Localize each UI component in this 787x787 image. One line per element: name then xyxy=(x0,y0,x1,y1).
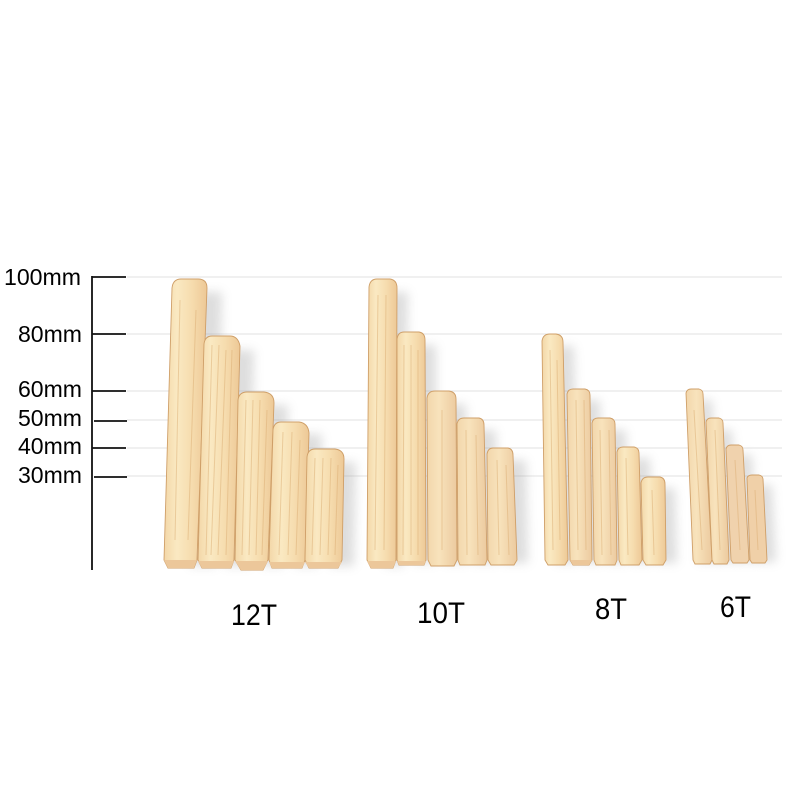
dowel group: 6T xyxy=(686,389,776,564)
size label: 10T: 10T xyxy=(417,597,465,630)
length labels: 40mm xyxy=(18,433,82,459)
length labels: 60mm xyxy=(18,376,82,402)
size label: 12T: 12T xyxy=(231,599,277,632)
dowel group: 10T xyxy=(367,279,528,568)
size label: 6T: 6T xyxy=(720,591,751,624)
grid lines xyxy=(127,277,782,476)
length labels: 30mm xyxy=(18,462,82,488)
length labels: 80mm xyxy=(18,321,82,347)
length labels: 100mm xyxy=(4,264,81,290)
dowel group: 8T xyxy=(542,334,677,565)
length labels xyxy=(4,264,82,488)
dowel group: 12T xyxy=(164,279,356,570)
size label: 8T: 8T xyxy=(595,593,627,626)
length labels: 50mm xyxy=(18,405,82,431)
length axis with ticks xyxy=(92,276,127,570)
